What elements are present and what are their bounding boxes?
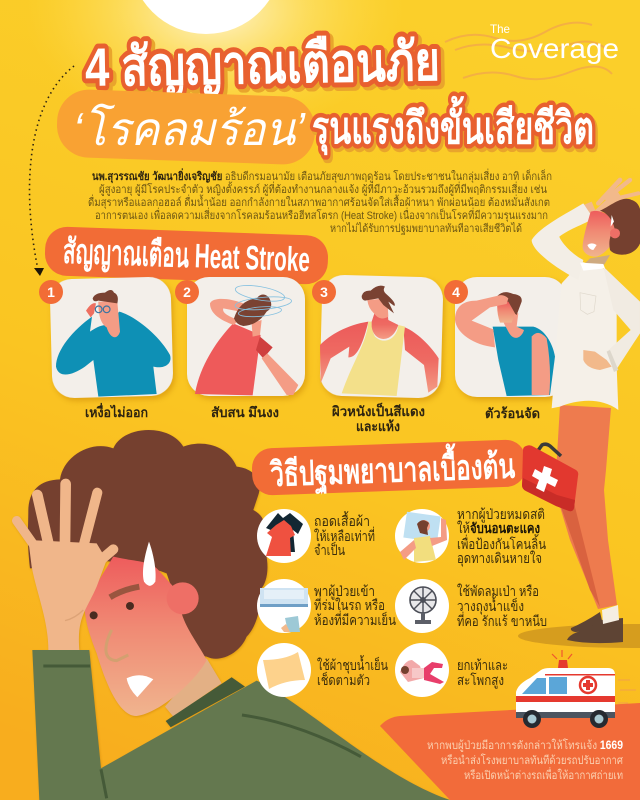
card 4: high temperature: [455, 277, 567, 397]
badge 1: [39, 280, 63, 304]
icon: first aid kit: [522, 444, 578, 511]
card labels: และแห้ง: [356, 419, 400, 434]
heading pill: Heat Stroke: สัญญาณเตือน Heat Stroke: [62, 233, 311, 280]
step: recovery position: อุดทางเดินหายใจ: [457, 550, 542, 567]
badge 2: [175, 280, 199, 304]
card labels: สับสน มึนงง: [211, 405, 279, 420]
highlight pill: โรคลมร้อน: [56, 89, 316, 165]
step: recovery position: [395, 506, 546, 567]
intro paragraph: ดื่มสุราหรือแอลกอฮอล์ ดื่มน้ำน้อย ออกกำลังกายในสภาพอากาศร้อนจัดใส่เสื้อผ้าหนา พักผ่อนน้อย ต้องหมั่นสังเกต: [88, 194, 550, 209]
step: remove clothing: ให้เหลือเท่าที่: [314, 527, 375, 544]
dotted arrow: [30, 66, 74, 276]
badge 4: 4: [452, 284, 460, 300]
left man: [17, 430, 450, 800]
step: raise legs: [395, 643, 508, 697]
intro paragraph: นพ.สุวรรณชัย วัฒนายิ่งเจริญชัย อธิบดีกรมอนามัย เตือนภัยสุขภาพฤดูร้อน โดยประชาชนในกลุ่มเสี่ยง อาทิ เด็กเล็ก: [92, 168, 552, 184]
intro paragraph: หากไม่ได้รับการปฐมพยาบาลทันทีอาจเสียชีวิตได้: [330, 222, 522, 235]
title line 1: 4 สัญญาณเตือนภัย: [88, 35, 444, 102]
step: shade / air conditioning: ห้องที่มีความเย็น: [314, 611, 396, 628]
right man: shadow, trousers, shoes: [518, 405, 640, 648]
footer panel: หากพบผู้ป่วยมีอาการดังกล่าวให้โทรแจ้ง 1669: [427, 738, 623, 752]
card 2: confusion: [187, 277, 305, 396]
step: shade / air conditioning: พาผู้ป่วยเข้า: [314, 583, 375, 600]
step: recovery position: เพื่อป้องกันโคนลิ้น: [457, 534, 546, 552]
step: remove clothing: จำเป็น: [314, 541, 345, 558]
body: [32, 650, 450, 800]
neck: [165, 658, 222, 717]
step: shade / air conditioning: [257, 579, 396, 633]
step: fan: [395, 579, 547, 633]
face: [85, 557, 207, 716]
step: raise legs: สะโพกสูง: [457, 672, 504, 689]
right man: upper body: [532, 180, 640, 410]
card labels: [85, 402, 540, 434]
step: cold towel: ใช้ผ้าชุบน้ำเย็น: [317, 655, 388, 674]
hair: [28, 430, 267, 659]
step: shade / air conditioning: ที่ร่มในรถ หรือ: [314, 596, 385, 613]
step: cold towel: [257, 643, 388, 697]
heading pill: first aid: วิธีปฐมพยาบาลเบื้องต้น: [269, 441, 516, 497]
sun: [130, 0, 282, 34]
badge 2: 2: [183, 284, 191, 300]
card 1: no sweat: [49, 276, 174, 399]
footer panel: [380, 703, 640, 800]
step: remove clothing: ถอดเสื้อผ้า: [314, 511, 370, 529]
badge 4: [444, 280, 468, 304]
card labels: ตัวร้อนจัด: [485, 406, 540, 421]
badge 1: 1: [47, 284, 55, 300]
step: cold towel: เช็ดตามตัว: [317, 671, 370, 688]
logo: The Coverage: The: [490, 22, 510, 36]
title line 1: 4 สัญญาณเตือนภัย: [85, 32, 441, 99]
heading pill: first aid: [251, 439, 527, 497]
badge 3: 3: [320, 284, 328, 300]
sweat drop: [143, 542, 156, 586]
step: fan: วางถุงน้ำแข็ง: [457, 596, 524, 615]
step: recovery position: หากผู้ป่วยหมดสติ: [457, 506, 545, 523]
logo: The Coverage: Coverage: [490, 33, 619, 64]
step: recovery position: ให้จับนอนตะแคง: [457, 520, 540, 536]
card 3: red skin: [319, 274, 444, 399]
step: fan: ใช้พัดลมเป่า หรือ: [457, 583, 539, 599]
step: raise legs: ยกเท้าและ: [457, 657, 508, 673]
intro paragraph: ผู้สูงอายุ ผู้มีโรคประจำตัว หญิงตั้งครรภ์ ผู้ที่ต้องทำงานกลางแจ้ง ผู้ที่มีภาวะอ้วนรวมถึงผู้ที่มีพฤติกรรมเสี่ยง เช่น: [99, 181, 547, 196]
card labels: ผิวหนังเป็นสีแดง: [332, 402, 425, 419]
highlight pill: โรคลมร้อน: ‘โรคลมร้อน’: [73, 103, 306, 155]
ambulance: [516, 650, 636, 728]
badge 3: [312, 280, 336, 304]
step: remove clothing: [257, 509, 375, 563]
card labels: เหงื่อไม่ออก: [85, 402, 148, 420]
logo: The Coverage: [445, 22, 619, 79]
hand: [17, 484, 113, 565]
intro paragraph: อาการตนเอง เพื่อลดความเสี่ยงจากโรคลมร้อนหรือฮีทสโตรก (Heat Stroke) เนื่องจากเป็นโรคที่มีความรุนแรงมาก: [95, 207, 548, 222]
title line 2: [312, 95, 596, 159]
step: fan: ที่คอ รักแร้ ขาหนีบ: [457, 612, 547, 629]
heading pill: Heat Stroke: [44, 226, 329, 285]
intro paragraph: [88, 168, 552, 235]
